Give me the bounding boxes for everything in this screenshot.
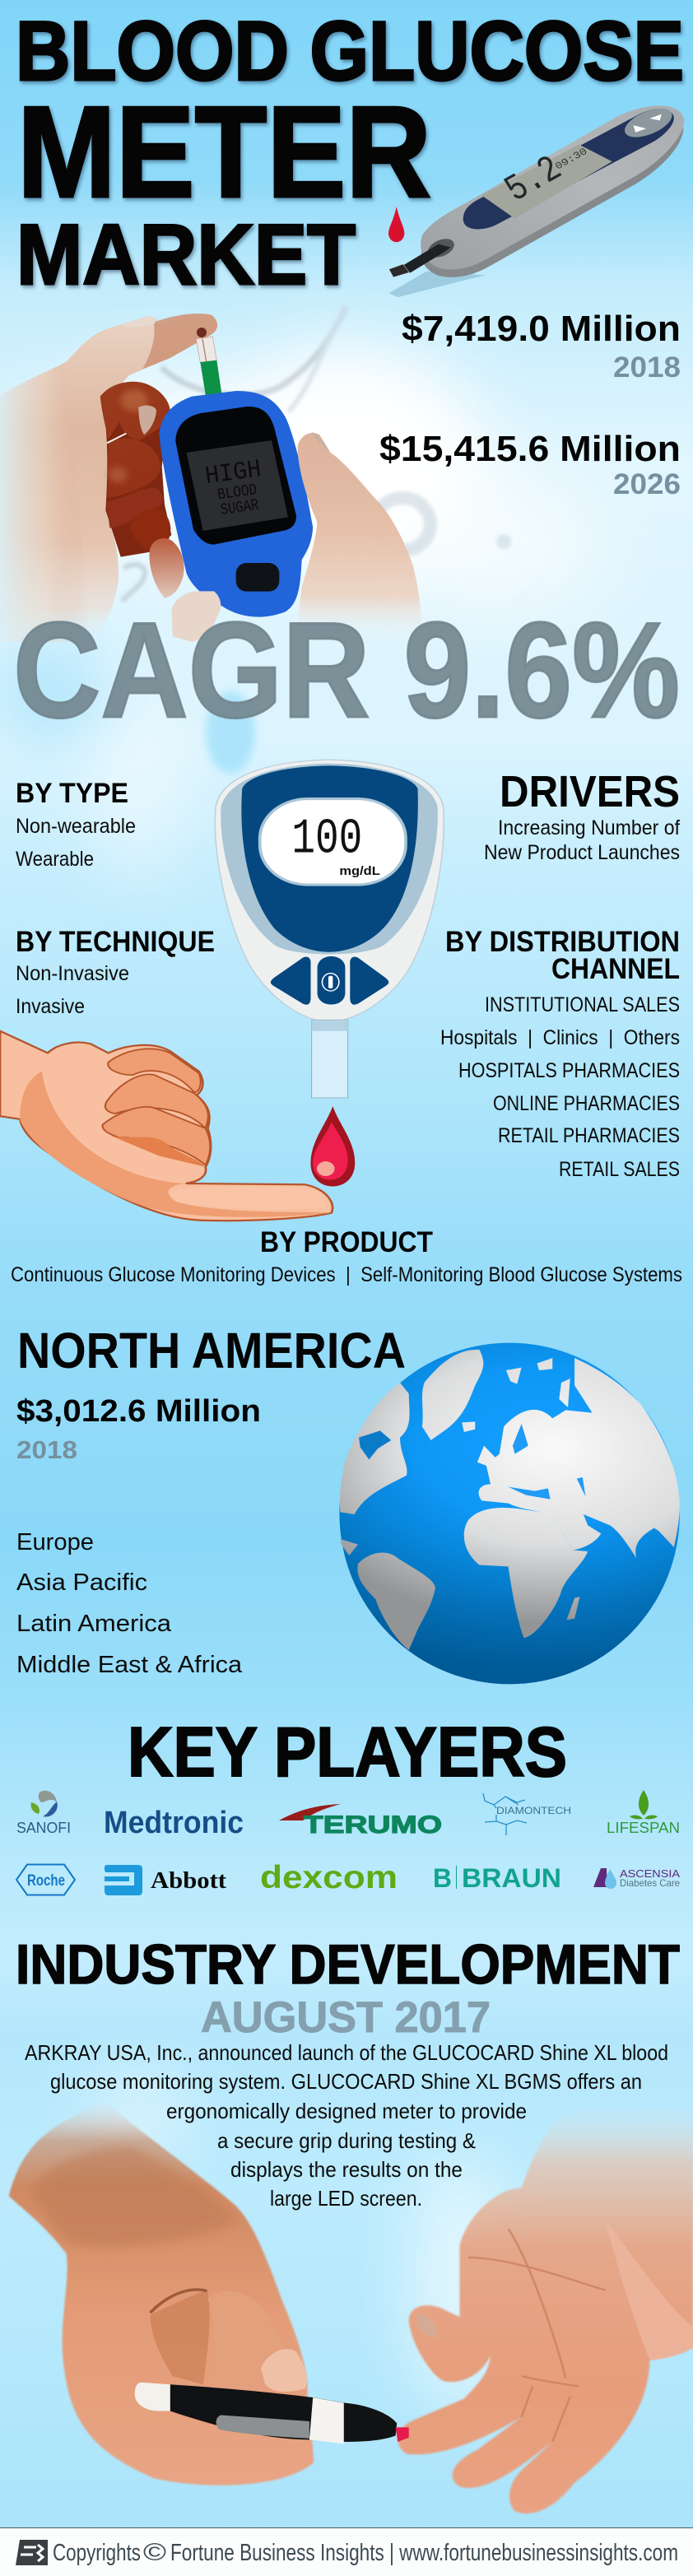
logo: terumo: TERUMO bbox=[304, 1811, 442, 1839]
logo: b braun: B bbox=[433, 1863, 452, 1893]
icon: grey glucose meter with test strip: 09:30 bbox=[553, 146, 589, 172]
2026 value: $15,415.6 Million bbox=[379, 429, 681, 469]
development description: ergonomically designed meter to provide bbox=[166, 2099, 527, 2123]
logo: lifespan: LIFESPAN bbox=[607, 1820, 680, 1836]
panel: market value bbox=[379, 309, 681, 500]
logo: medtronic: Medtronic bbox=[104, 1806, 244, 1840]
eurasia bbox=[479, 1358, 680, 1558]
drivers text: New Product Launches bbox=[484, 841, 680, 864]
logo: b braun: BRAUN bbox=[462, 1863, 561, 1893]
meter reading: 100 bbox=[291, 811, 362, 867]
distribution items bbox=[440, 993, 680, 1181]
right hand bbox=[296, 432, 422, 642]
icon: blood drop bbox=[388, 207, 404, 242]
icon: grey glucose meter with test strip: 5.2 bbox=[497, 149, 570, 212]
photo: hands holding blue meter bbox=[0, 314, 422, 642]
2018 value: $7,419.0 Million bbox=[402, 309, 681, 349]
heading: north america: NORTH AMERICA bbox=[17, 1323, 406, 1379]
type items bbox=[16, 815, 136, 871]
heading: by distribution channel: BY DISTRIBUTION bbox=[445, 926, 680, 958]
logo: ascensia: ASCENSIA bbox=[620, 1867, 680, 1880]
development description: displays the results on the bbox=[230, 2157, 463, 2182]
meter unit: mg/dL bbox=[339, 863, 380, 878]
logo: dexcom: dexcom bbox=[260, 1860, 398, 1895]
south america bbox=[357, 1553, 435, 1650]
region list: Europe bbox=[16, 1529, 94, 1555]
title line: market: MARKET bbox=[16, 207, 356, 303]
icon: grey glucose meter with test strip bbox=[388, 103, 684, 297]
blue meter bbox=[159, 391, 313, 617]
panel: company logos bbox=[16, 1790, 680, 1895]
title bbox=[16, 4, 684, 303]
footer: © bbox=[143, 2539, 166, 2566]
technique items: Invasive bbox=[16, 995, 85, 1018]
panel: by product bbox=[11, 1226, 682, 1286]
heading: drivers: DRIVERS bbox=[500, 767, 680, 816]
type items: Non-wearable bbox=[16, 815, 136, 838]
panel: drivers bbox=[484, 767, 680, 864]
test strip bbox=[196, 337, 221, 397]
footer bbox=[0, 2527, 693, 2576]
type items: Wearable bbox=[16, 848, 94, 871]
photo: left hand with lancet device bbox=[9, 2102, 397, 2485]
heading: by technique: BY TECHNIQUE bbox=[16, 926, 215, 958]
test strip bbox=[312, 1020, 348, 1098]
region list: Asia Pacific bbox=[16, 1569, 147, 1596]
development description: glucose monitoring system. GLUCOCARD Shine XL BGMS offers an bbox=[50, 2069, 642, 2094]
heading: key players: KEY PLAYERS bbox=[128, 1713, 567, 1792]
africa bbox=[464, 1508, 588, 1638]
logo: diamontech: DIAMONTECH bbox=[496, 1805, 571, 1816]
panel: regions bbox=[16, 1323, 406, 1678]
blue meter: SUGAR bbox=[219, 496, 260, 519]
region list: Latin America bbox=[16, 1611, 172, 1637]
region list bbox=[16, 1529, 243, 1678]
date: AUGUST 2017 bbox=[201, 1993, 491, 2042]
photo: right hand bbox=[396, 2106, 693, 2513]
logo: ascensia: Diabetes Care bbox=[620, 1877, 680, 1889]
development description bbox=[25, 2040, 668, 2211]
icon: globe bbox=[339, 1343, 680, 1684]
technique items: Non-Invasive bbox=[16, 962, 129, 985]
north america bbox=[340, 1383, 410, 1514]
logo: roche bbox=[16, 1865, 75, 1895]
title line: meter: METER bbox=[17, 80, 431, 225]
logo: sanofi bbox=[16, 1791, 71, 1836]
blue meter: HIGH bbox=[203, 455, 263, 491]
left hand bbox=[0, 314, 217, 642]
logo: terumo bbox=[279, 1804, 442, 1839]
logo: abbott bbox=[105, 1865, 227, 1895]
icon: blood drop bbox=[311, 1106, 355, 1187]
heading: by product: BY PRODUCT bbox=[260, 1226, 433, 1258]
heading: by type: BY TYPE bbox=[16, 778, 128, 809]
lancet device bbox=[135, 2383, 397, 2443]
logo: ascensia bbox=[593, 1867, 680, 1889]
north america year: 2018 bbox=[16, 1435, 77, 1464]
heading: by distribution channel: CHANNEL bbox=[551, 953, 680, 985]
stethoscope background photo bbox=[122, 306, 543, 617]
bottom thumb bbox=[171, 591, 221, 642]
technique items bbox=[16, 962, 129, 1018]
heading: by distribution channel bbox=[445, 926, 680, 985]
greenland bbox=[422, 1350, 483, 1440]
panel: by type bbox=[16, 778, 136, 871]
meter buttons bbox=[271, 956, 388, 1005]
drivers text bbox=[484, 816, 680, 864]
fingers in shadow bbox=[100, 387, 171, 557]
region list: Middle East & Africa bbox=[16, 1652, 243, 1678]
logo: roche: Roche bbox=[27, 1872, 65, 1890]
blue meter: BLOOD bbox=[216, 481, 258, 505]
logo: diamontech bbox=[483, 1793, 571, 1835]
drivers text: Increasing Number of bbox=[498, 816, 680, 839]
logo: sanofi: SANOFI bbox=[16, 1820, 71, 1836]
icon: cartoon hand pricking finger bbox=[0, 1031, 333, 1221]
development description: large LED screen. bbox=[270, 2186, 422, 2211]
copyright text: Copyrights bbox=[53, 2540, 141, 2566]
logo: abbott: Abbott bbox=[151, 1868, 227, 1894]
2026 year: 2026 bbox=[613, 468, 681, 500]
north america value: $3,012.6 Million bbox=[16, 1394, 261, 1429]
icon: fortune business insights logo bbox=[16, 2540, 48, 2565]
panel: by distribution channel bbox=[440, 926, 680, 1181]
panel: by technique bbox=[16, 926, 215, 1018]
logo: lifespan bbox=[607, 1790, 680, 1836]
panel: industry development text bbox=[25, 1993, 668, 2211]
2018 year: 2018 bbox=[613, 351, 681, 384]
development description: a secure grip during testing & bbox=[217, 2128, 476, 2153]
icon: large glucose meter bbox=[215, 760, 444, 1187]
